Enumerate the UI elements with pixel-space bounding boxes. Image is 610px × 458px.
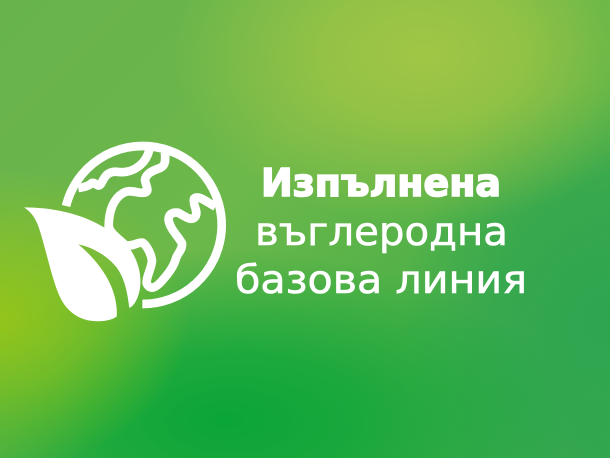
heading line 3: базова линия [235,258,527,303]
title text [235,161,527,303]
heading line 2: въглеродна [255,210,508,255]
northern continent outline [78,150,149,188]
leaf [24,207,140,321]
globe outline [66,146,222,304]
icon: globe with leaf [24,146,222,321]
main continent outline [109,153,215,288]
heading line 1: Изпълнена [261,161,501,205]
